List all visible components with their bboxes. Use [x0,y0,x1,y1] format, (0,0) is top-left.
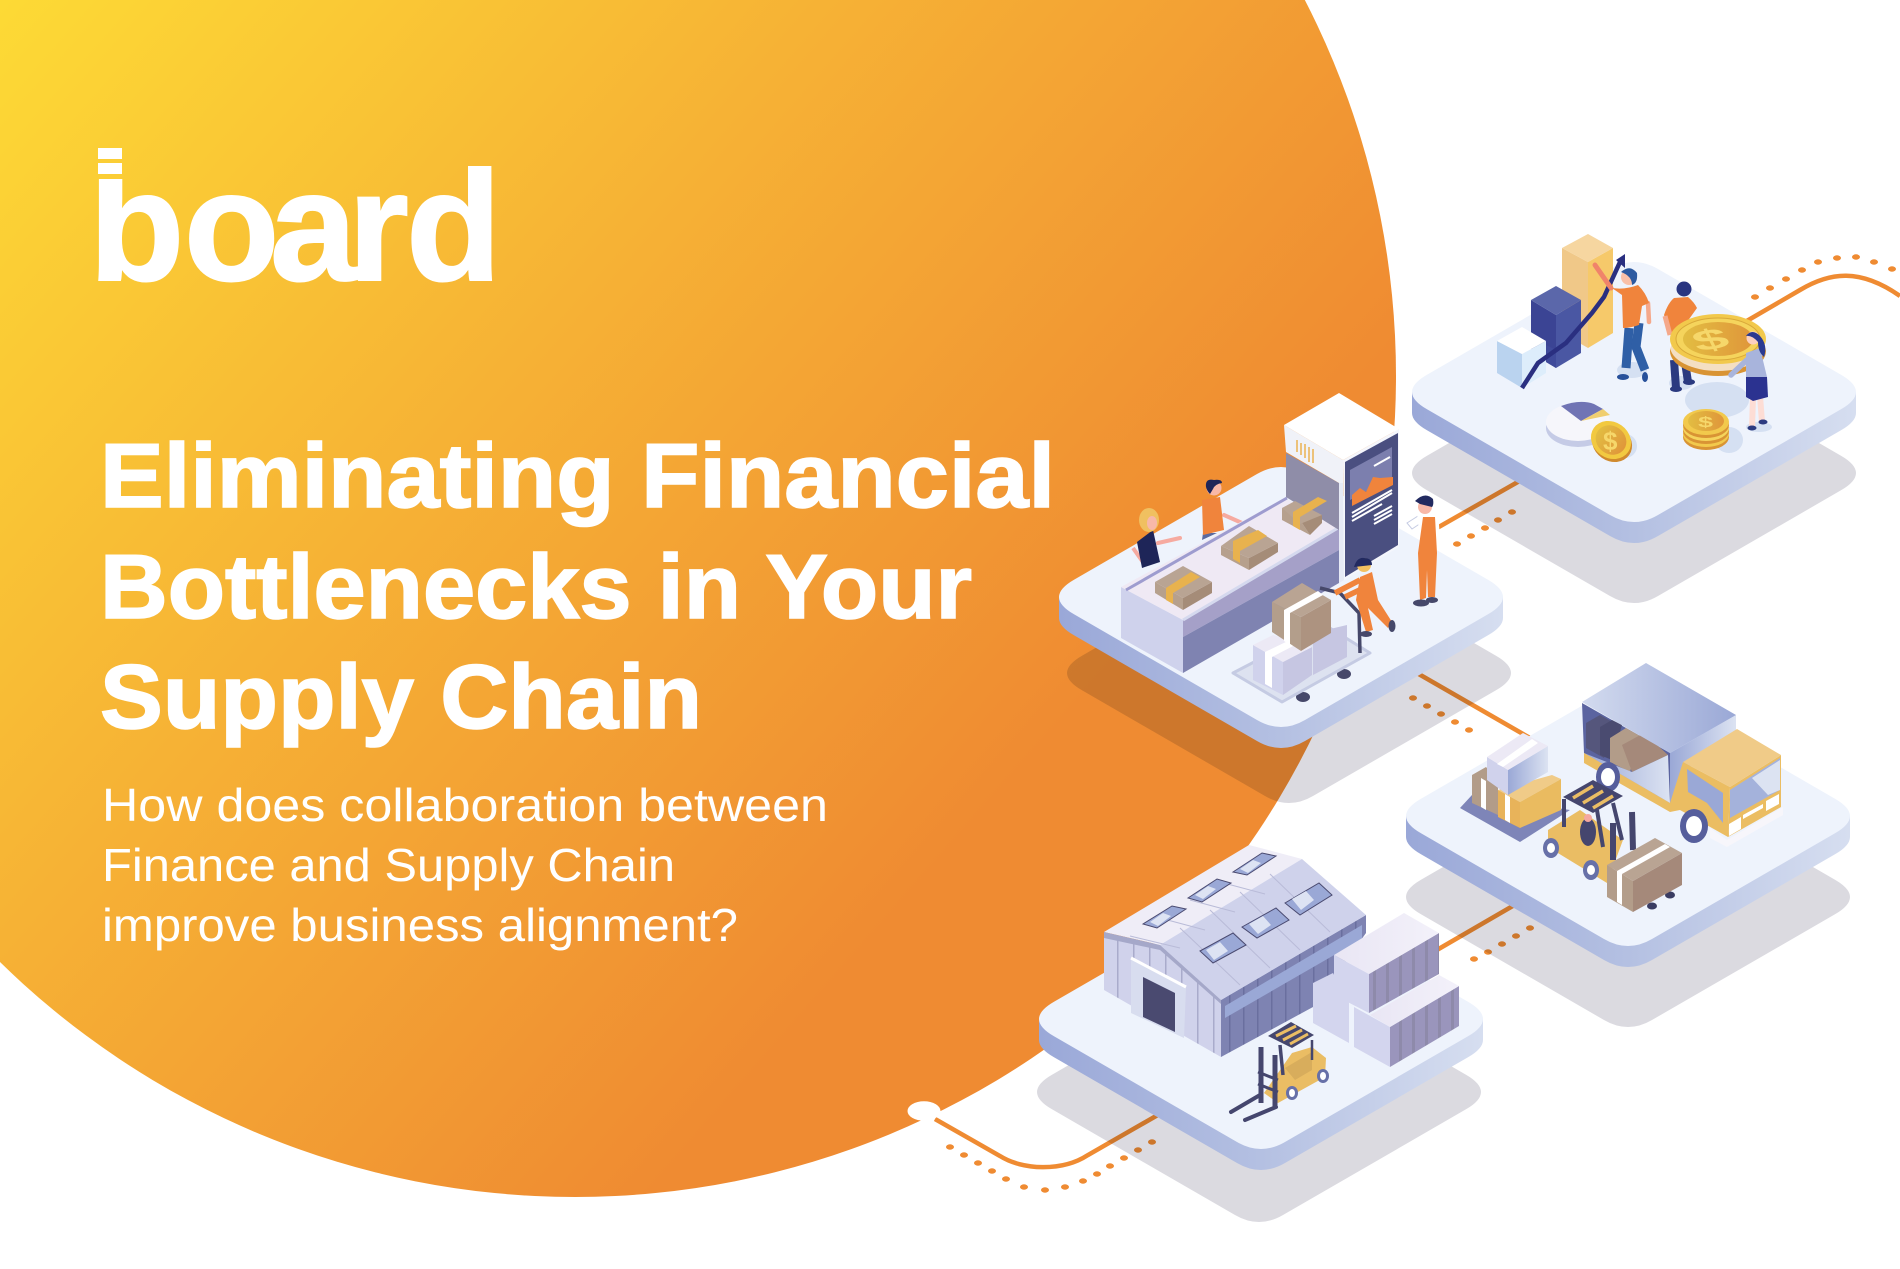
subtitle [102,779,828,951]
subtitle: improve business alignment? [102,899,738,951]
truck [1582,663,1783,847]
big coin [1670,314,1766,376]
white cube [1497,327,1556,388]
coin on edge: $ [1603,426,1618,456]
scanner tower [1284,393,1399,583]
conveyor belt [1121,498,1339,673]
cart with boxes [1233,583,1370,702]
pallet with boxes [1460,733,1570,842]
pie chart [1546,402,1610,447]
forklift [1231,1022,1329,1120]
platform shadows [1037,343,1856,1222]
title: Supply Chain [100,647,702,748]
boxes on belt [1155,497,1327,610]
yellow bar [1562,234,1613,348]
panel: truck platform [1406,663,1850,967]
person carrying coin [1664,282,1697,392]
big coin: $ [1686,322,1735,358]
shipping containers [1313,913,1459,1067]
warehouse [1104,845,1366,1057]
shadows on floor [1613,362,1772,458]
coin stack [1683,409,1729,450]
dotted connector paths [946,254,1896,1193]
start node [908,1101,940,1121]
person: man in orange [1202,480,1242,540]
panel: conveyor platform [1059,393,1503,748]
panel: warehouse platform [1039,845,1483,1170]
connector lines [935,276,1900,1167]
title: Bottlenecks in Your [100,537,972,638]
coin stack: $ [1698,414,1713,430]
person: blonde woman [1133,508,1180,568]
logo: board: board [89,140,501,314]
panel: finance platform [1412,234,1856,543]
orange gradient circle background [0,0,1396,1197]
subtitle: How does collaboration between [102,779,828,831]
woman carrying coin [1731,332,1768,430]
blue bar [1531,286,1581,368]
title: Eliminating Financial [100,426,1055,527]
person raising arm [1595,265,1649,382]
title [100,426,1055,748]
worker with tablet [1407,495,1440,606]
worker pushing cart [1335,558,1396,637]
growth arrow [1522,254,1625,388]
forklift with box [1543,780,1682,912]
subtitle: Finance and Supply Chain [102,839,675,891]
coin on edge [1583,413,1640,470]
